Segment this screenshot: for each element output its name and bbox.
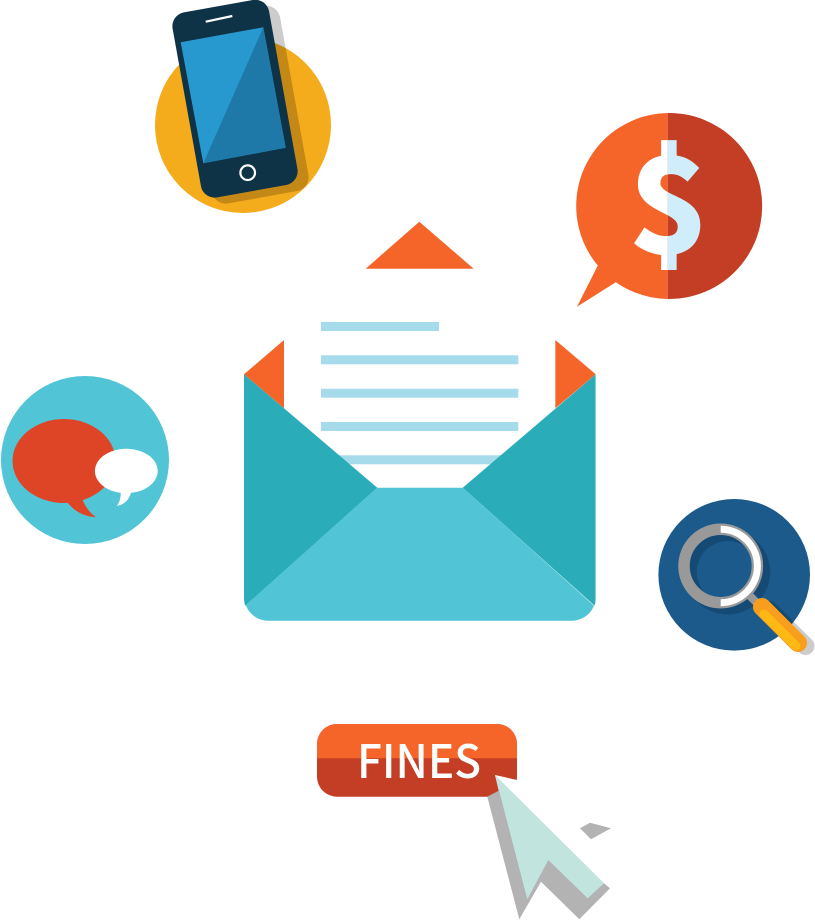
phone shadow — [181, 4, 311, 206]
handle — [762, 607, 798, 643]
handle highlight — [764, 614, 796, 646]
envelope front — [246, 488, 594, 621]
icon: dollar speech bubble — [576, 100, 762, 307]
bubble tail — [577, 260, 640, 307]
letter lines — [321, 322, 518, 464]
envelope top flap tip — [366, 222, 474, 269]
icon: smartphone on yellow circle — [155, 0, 331, 213]
bubble right half — [668, 113, 762, 299]
red speech bubble — [12, 419, 116, 517]
phone screen — [181, 27, 286, 163]
magnifier neck — [750, 596, 761, 607]
button: FINES — [317, 724, 517, 797]
teal circle — [1, 376, 169, 544]
cursor shadow — [487, 790, 610, 919]
dollar sign white half: $ — [628, 100, 710, 292]
envelope side flaps — [244, 374, 596, 620]
screen shade — [203, 27, 286, 163]
cursor shard — [580, 823, 611, 839]
bubble left half — [576, 113, 668, 299]
button shape — [317, 724, 517, 797]
lens shadow — [685, 530, 770, 614]
icon: chat bubbles — [1, 376, 169, 544]
icon: cursor arrow — [487, 775, 611, 919]
handle shadow — [769, 610, 806, 646]
icon: magnifying glass — [658, 499, 810, 651]
button label: FINES — [357, 726, 481, 792]
phone home button — [240, 165, 255, 180]
envelope inner left — [244, 340, 284, 408]
ring — [684, 529, 757, 603]
ring highlight — [720, 526, 761, 606]
white speech bubble — [95, 449, 158, 506]
blue circle — [658, 499, 810, 651]
cursor body — [495, 775, 604, 899]
phone body — [170, 0, 300, 200]
icon: open envelope — [244, 222, 596, 621]
phone speaker — [206, 16, 232, 22]
dollar sign blue half: $ — [628, 100, 710, 292]
yellow circle — [155, 37, 331, 213]
envelope inner right — [555, 340, 596, 408]
